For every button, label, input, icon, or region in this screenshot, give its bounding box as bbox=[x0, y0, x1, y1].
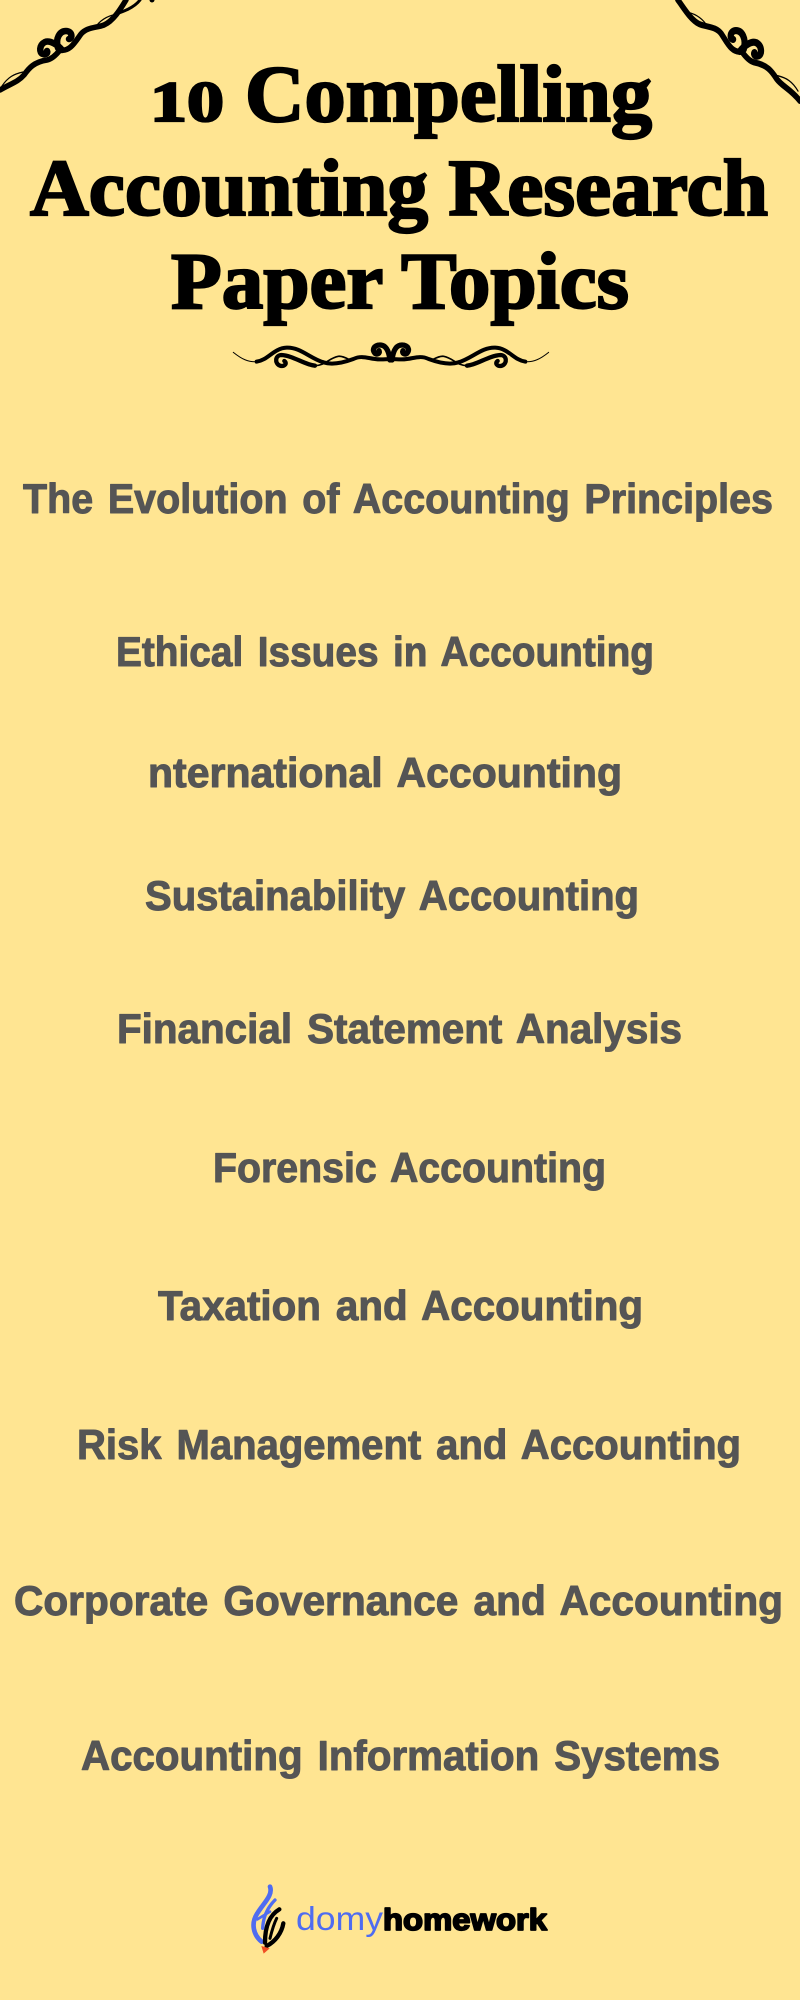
topic 10: Accounting Information Systems bbox=[81, 1732, 720, 1779]
title: 10 bbox=[150, 71, 224, 134]
title bbox=[30, 51, 768, 326]
title: Accounting Research bbox=[30, 145, 768, 233]
icon: top-right corner ornament bbox=[677, 0, 800, 101]
title: Compelling bbox=[245, 51, 652, 139]
title: Paper Topics bbox=[171, 238, 629, 326]
logo: domyhomework bbox=[254, 1887, 548, 1954]
icon: flame and pen nib bbox=[254, 1887, 283, 1954]
icon: ornament under title bbox=[233, 345, 549, 366]
icon: top-left corner ornament bbox=[0, 0, 154, 90]
topic 1: The Evolution of Accounting Principles bbox=[23, 475, 773, 522]
topic 8: Risk Management and Accounting bbox=[77, 1421, 741, 1468]
topic 9: Corporate Governance and Accounting bbox=[14, 1577, 783, 1624]
topic 7: Taxation and Accounting bbox=[158, 1282, 643, 1329]
logo wordmark bbox=[296, 1900, 548, 1937]
logo wordmark: domy bbox=[296, 1900, 384, 1937]
topic 6: Forensic Accounting bbox=[213, 1144, 606, 1191]
topic 2: Ethical Issues in Accounting bbox=[116, 628, 654, 675]
topic 4: Sustainability Accounting bbox=[145, 872, 639, 919]
topic 3: nternational Accounting bbox=[148, 749, 622, 796]
topic 5: Financial Statement Analysis bbox=[117, 1005, 682, 1052]
logo wordmark: homework bbox=[383, 1902, 548, 1937]
